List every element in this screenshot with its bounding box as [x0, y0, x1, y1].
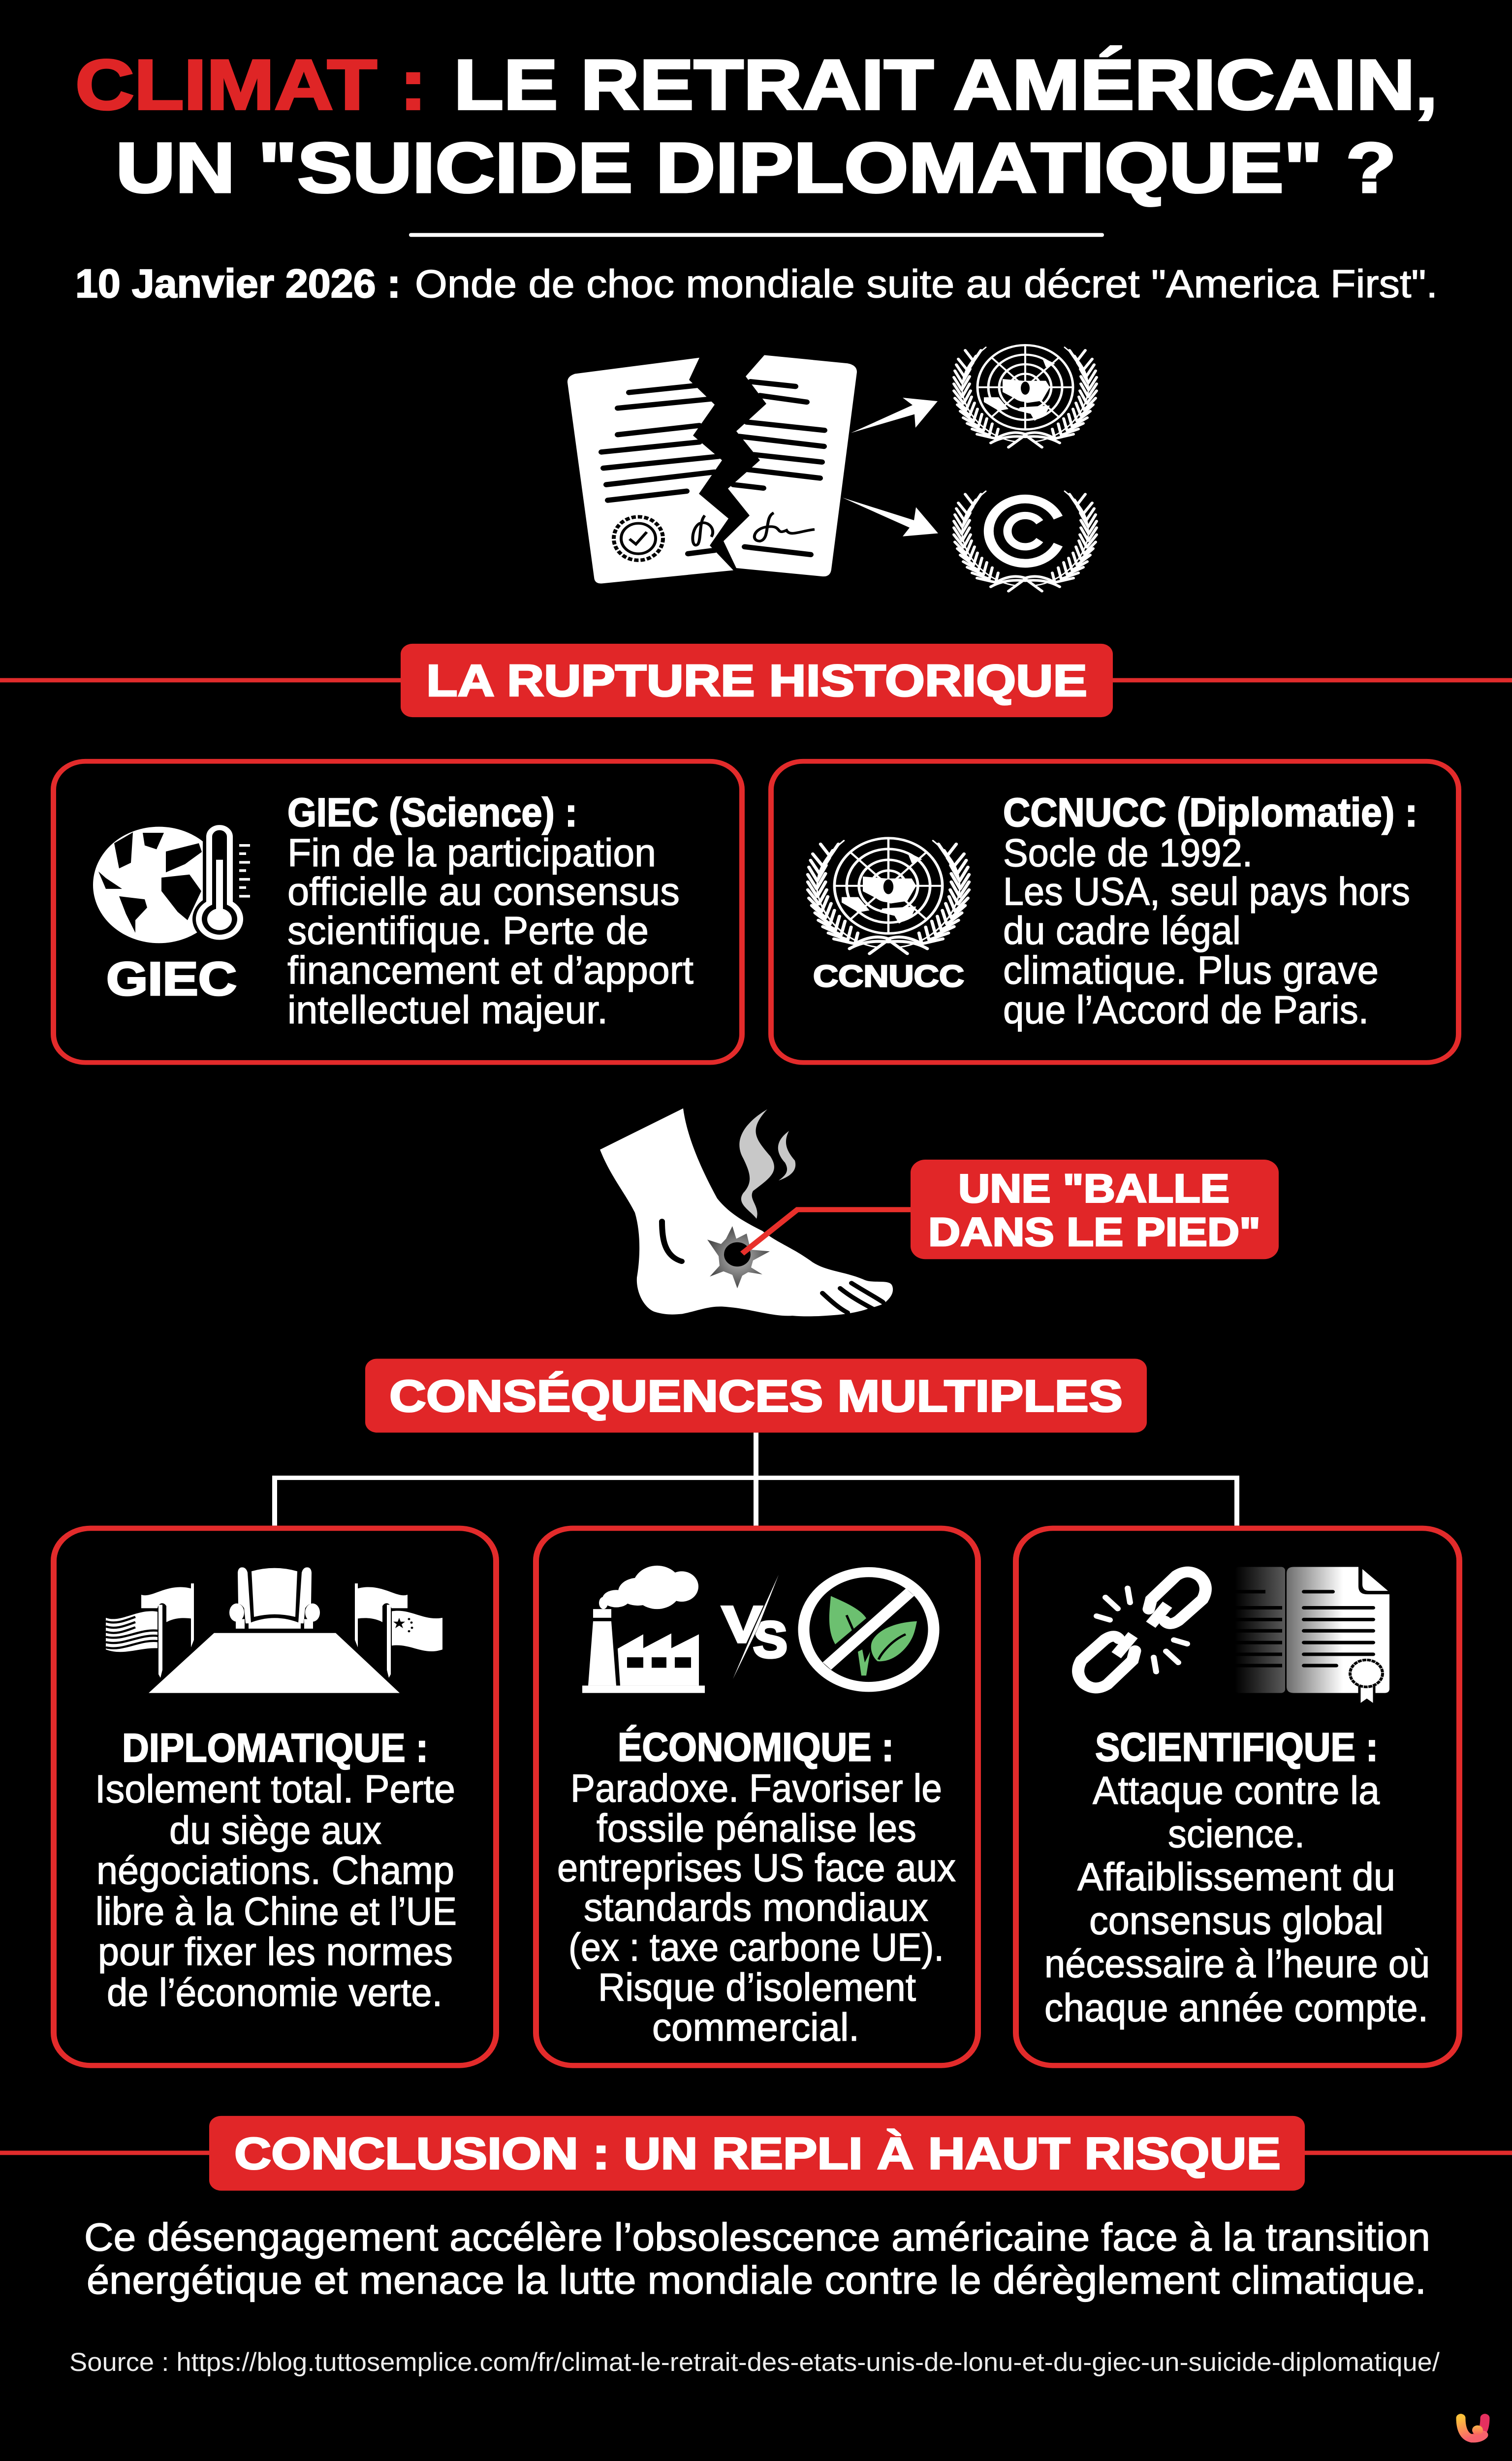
text block: scientifique — [1044, 1725, 1430, 2029]
text block: économique: standards mondiaux — [584, 1885, 928, 1929]
icon: logo — [1461, 2418, 1485, 2438]
text block: GIEC: Fin de la participation — [287, 831, 656, 875]
panel: CCNUCC — [771, 761, 1459, 1063]
text block: scientifique: Attaque contre la — [1093, 1768, 1380, 1812]
icon: UNFCCC emblem — [954, 491, 1097, 591]
title: LE RETRAIT AMÉRICAIN, — [454, 45, 1438, 125]
icon: smoke — [739, 1109, 795, 1219]
section: conclusion: CONCLUSION : UN REPLI À HAUT RISQUE — [234, 2128, 1281, 2178]
text block: scientifique: nécessaire à l’heure où — [1044, 1942, 1430, 1986]
section: la rupture historique: LA RUPTURE HISTORIQUE — [426, 655, 1087, 705]
icon: fading document with seal — [1235, 1567, 1389, 1705]
conclusion text: énergétique et menace la lutte mondiale contre le dérèglement climatique. — [87, 2258, 1426, 2302]
section: la rupture historique — [0, 644, 1512, 717]
arrow to UNFCCC — [843, 498, 938, 536]
title: CLIMAT : — [75, 45, 427, 125]
text block: diplomatique: de l’économie verte. — [107, 1970, 442, 2014]
title — [75, 45, 1438, 207]
text block: économique: (ex : taxe carbone UE). — [568, 1925, 944, 1969]
callout: balle dans le pied — [742, 1160, 1279, 1259]
connector tree — [275, 1433, 1237, 1526]
text block: scientifique: science. — [1168, 1812, 1305, 1856]
text block: GIEC: scientifique. Perte de — [287, 909, 649, 952]
icon: versus: S — [753, 1611, 788, 1669]
text block: GIEC — [287, 790, 693, 1032]
icon label: GIEC: GIEC — [106, 952, 237, 1005]
text block: économique: commercial. — [652, 2005, 859, 2049]
callout: balle dans le pied: DANS LE PIED" — [928, 1210, 1260, 1255]
text block: diplomatique: du siège aux — [169, 1808, 381, 1852]
text block: CCNUCC — [1003, 790, 1418, 1032]
text block: diplomatique: négociations. Champ — [96, 1848, 454, 1892]
text block: diplomatique — [95, 1726, 457, 2014]
arrow to UN — [851, 398, 938, 433]
icon: torn document — [567, 355, 857, 583]
text block: CCNUCC: que l’Accord de Paris. — [1003, 988, 1369, 1032]
text block: CCNUCC: CCNUCC (Diplomatie) : — [1003, 790, 1418, 835]
icon label: CCNUCC: CCNUCC — [813, 959, 964, 993]
text block: diplomatique: DIPLOMATIQUE : — [122, 1726, 428, 1770]
title: UN "SUICIDE DIPLOMATIQUE" ? — [116, 128, 1396, 207]
text block: économique: ÉCONOMIQUE : — [618, 1725, 894, 1769]
conclusion text: Ce désengagement accélère l’obsolescence américaine face à la transition — [84, 2215, 1430, 2259]
text block: diplomatique: pour fixer les normes — [98, 1929, 453, 1973]
icon: factory — [582, 1566, 705, 1693]
text block: économique — [557, 1725, 956, 2049]
panel: scientifique — [1016, 1528, 1459, 2065]
heading: conséquences multiples: CONSÉQUENCES MULTIPLES — [389, 1371, 1123, 1421]
subtitle: Onde de choc mondiale suite au décret "America First". — [415, 262, 1438, 306]
text block: économique: fossile pénalise les — [597, 1806, 916, 1850]
text block: économique: Paradoxe. Favoriser le — [570, 1766, 942, 1810]
text block: scientifique: Affaiblissement du — [1077, 1855, 1395, 1898]
callout: balle dans le pied: UNE "BALLE — [958, 1167, 1229, 1211]
icon: versus — [722, 1575, 788, 1679]
icon: broken chain — [1078, 1572, 1205, 1688]
text block: GIEC: officielle au consensus — [287, 869, 680, 913]
heading: conséquences multiples — [365, 1359, 1147, 1433]
text block: CCNUCC: du cadre légal — [1003, 909, 1241, 952]
text block: GIEC: GIEC (Science) : — [287, 790, 577, 835]
icon: versus: V — [722, 1596, 764, 1653]
text block: économique: entreprises US face aux — [557, 1846, 956, 1890]
icon: wounded foot — [600, 1108, 893, 1316]
text block: scientifique: consensus global — [1089, 1899, 1384, 1943]
text block: GIEC: intellectuel majeur. — [287, 988, 608, 1032]
text block: CCNUCC: climatique. Plus grave — [1003, 948, 1379, 992]
panel: économique — [536, 1528, 978, 2065]
subtitle: 10 Janvier 2026 : — [75, 261, 401, 306]
icon: UN emblem — [808, 838, 969, 953]
icon: prohibited leaves — [804, 1572, 934, 1687]
panel: diplomatique — [54, 1528, 496, 2065]
conclusion text — [84, 2215, 1430, 2302]
text block: CCNUCC: Socle de 1992. — [1003, 831, 1253, 875]
section: conclusion — [0, 2116, 1512, 2191]
text block: diplomatique: libre à la Chine et l’UE — [95, 1889, 457, 1933]
text block: scientifique: SCIENTIFIQUE : — [1095, 1725, 1378, 1769]
icon: UN emblem — [954, 345, 1097, 447]
text block: CCNUCC: Les USA, seul pays hors — [1003, 869, 1410, 913]
text block: économique: Risque d’isolement — [598, 1965, 916, 2009]
icon: globe and thermometer — [93, 827, 250, 943]
text block: GIEC: financement et d’apport — [287, 948, 693, 992]
text block: diplomatique: Isolement total. Perte — [95, 1767, 455, 1811]
icon: empty chair at the table with flags — [106, 1567, 442, 1693]
panel: GIEC — [53, 761, 742, 1063]
text block: scientifique: chaque année compte. — [1044, 1986, 1428, 2029]
